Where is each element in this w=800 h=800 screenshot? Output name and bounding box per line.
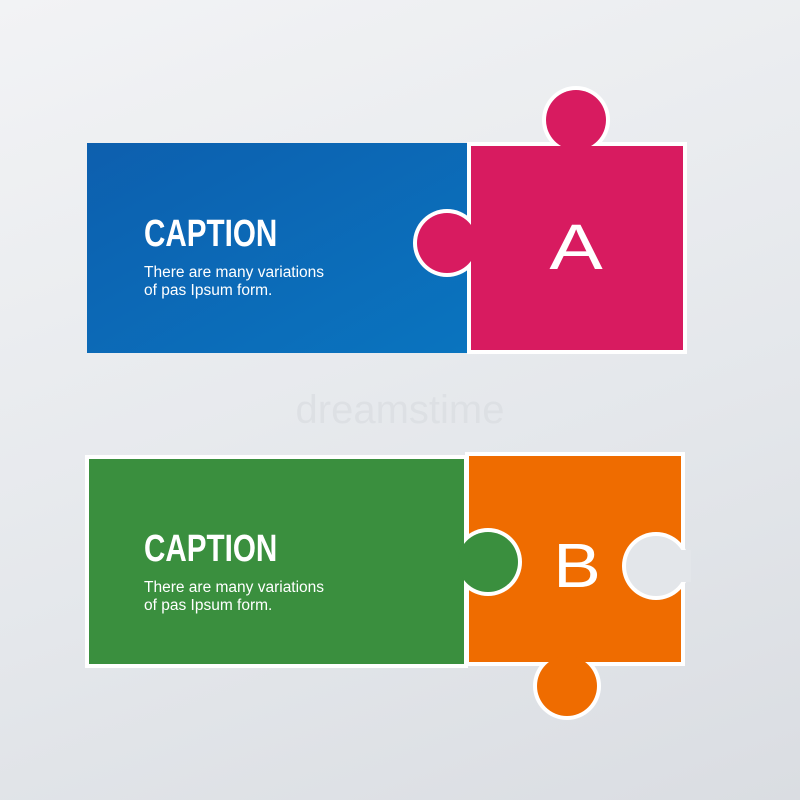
puzzle row A (87, 86, 687, 354)
panel: blue caption block A (87, 143, 469, 353)
piece B orange (469, 456, 681, 662)
puzzle row B: of pas Ipsum form. (144, 597, 272, 614)
white outlines B (85, 452, 685, 720)
cutout right (622, 532, 690, 600)
watermark: dreamstime (296, 388, 504, 432)
caption A heading: CAPTION (144, 213, 277, 255)
green knob outline (454, 528, 522, 596)
letter B: B (553, 532, 601, 601)
caption B heading: CAPTION (144, 528, 277, 570)
puzzle row B (85, 452, 691, 720)
piece A white outline (413, 86, 687, 354)
letter A: A (549, 212, 603, 283)
puzzle row A: of pas Ipsum form. (144, 282, 272, 299)
panel: green caption block B (89, 459, 464, 664)
green knob (458, 532, 518, 592)
caption B body: There are many variations (144, 579, 324, 596)
caption A body: There are many variations (144, 264, 324, 281)
piece A pink (417, 90, 683, 350)
